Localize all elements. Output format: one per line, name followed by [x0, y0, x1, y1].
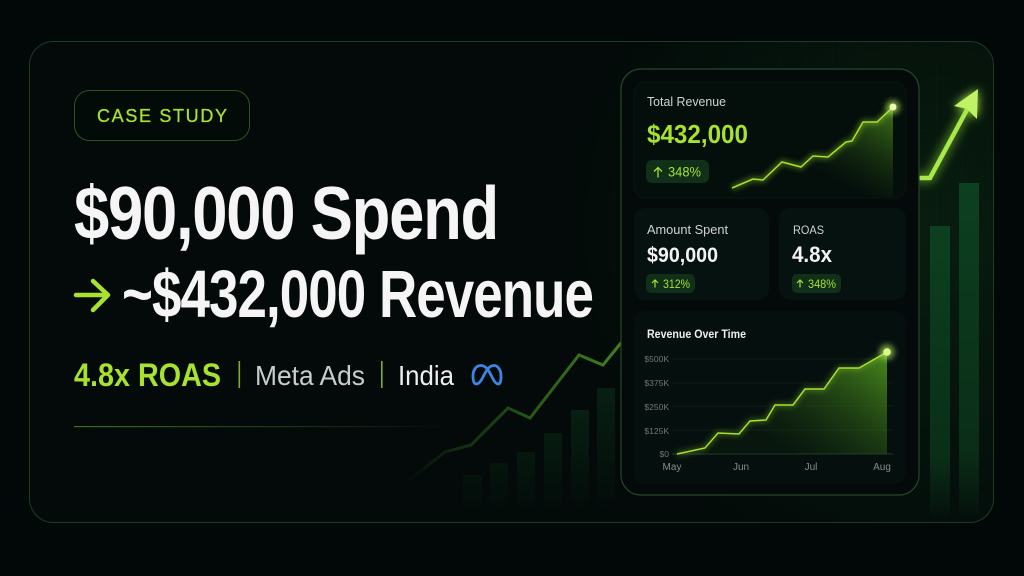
line chart: $500K — [644, 354, 669, 364]
infographic canvas — [29, 41, 994, 523]
panel: roas — [779, 208, 906, 300]
badge: 348% — [646, 160, 709, 183]
panel: total revenue — [634, 82, 906, 198]
headline — [74, 171, 593, 332]
line chart: Aug — [873, 462, 891, 473]
background growth line — [405, 338, 625, 483]
line chart: Jul — [805, 462, 817, 473]
icon: meta logo — [473, 366, 501, 384]
panel: total revenue: Total Revenue — [647, 95, 726, 109]
line chart — [644, 344, 894, 473]
badge: case study: CASE STUDY — [97, 106, 227, 126]
badge: 348%: 348% — [668, 164, 701, 180]
line chart: Jun — [733, 462, 749, 473]
badge: 312%: 312% — [663, 279, 690, 291]
panel: amount spent: $90,000 — [647, 244, 718, 267]
divider line — [74, 426, 454, 427]
line chart: $0 — [660, 449, 669, 459]
panel: total revenue: $432,000 — [647, 119, 748, 149]
panel: amount spent: Amount Spent — [647, 223, 729, 237]
dashboard card — [621, 69, 919, 495]
line chart: $125K — [644, 426, 669, 436]
panel: amount spent — [634, 208, 769, 300]
badge: case study — [74, 90, 250, 140]
growth arrow — [915, 89, 978, 178]
panel: revenue over time: Revenue Over Time — [647, 327, 746, 341]
stats row: India — [398, 360, 454, 391]
sparkline — [732, 100, 900, 197]
headline: ~$432,000 Revenue — [122, 257, 593, 332]
line chart: May — [663, 462, 681, 473]
badge: 348%: 348% — [808, 279, 836, 291]
stats row — [74, 357, 501, 393]
panel: revenue over time — [634, 311, 906, 484]
line chart: $250K — [644, 402, 669, 412]
headline: $90,000 Spend — [74, 171, 498, 255]
panel: roas: 4.8x — [792, 242, 833, 267]
stats row: 4.8x ROAS — [74, 357, 221, 393]
background bar chart — [463, 183, 979, 516]
line chart: $375K — [644, 378, 669, 388]
panel: roas: ROAS — [793, 223, 824, 237]
outer panel — [30, 42, 994, 522]
stats row: Meta Ads — [255, 360, 365, 391]
icon: green arrow — [76, 281, 108, 310]
